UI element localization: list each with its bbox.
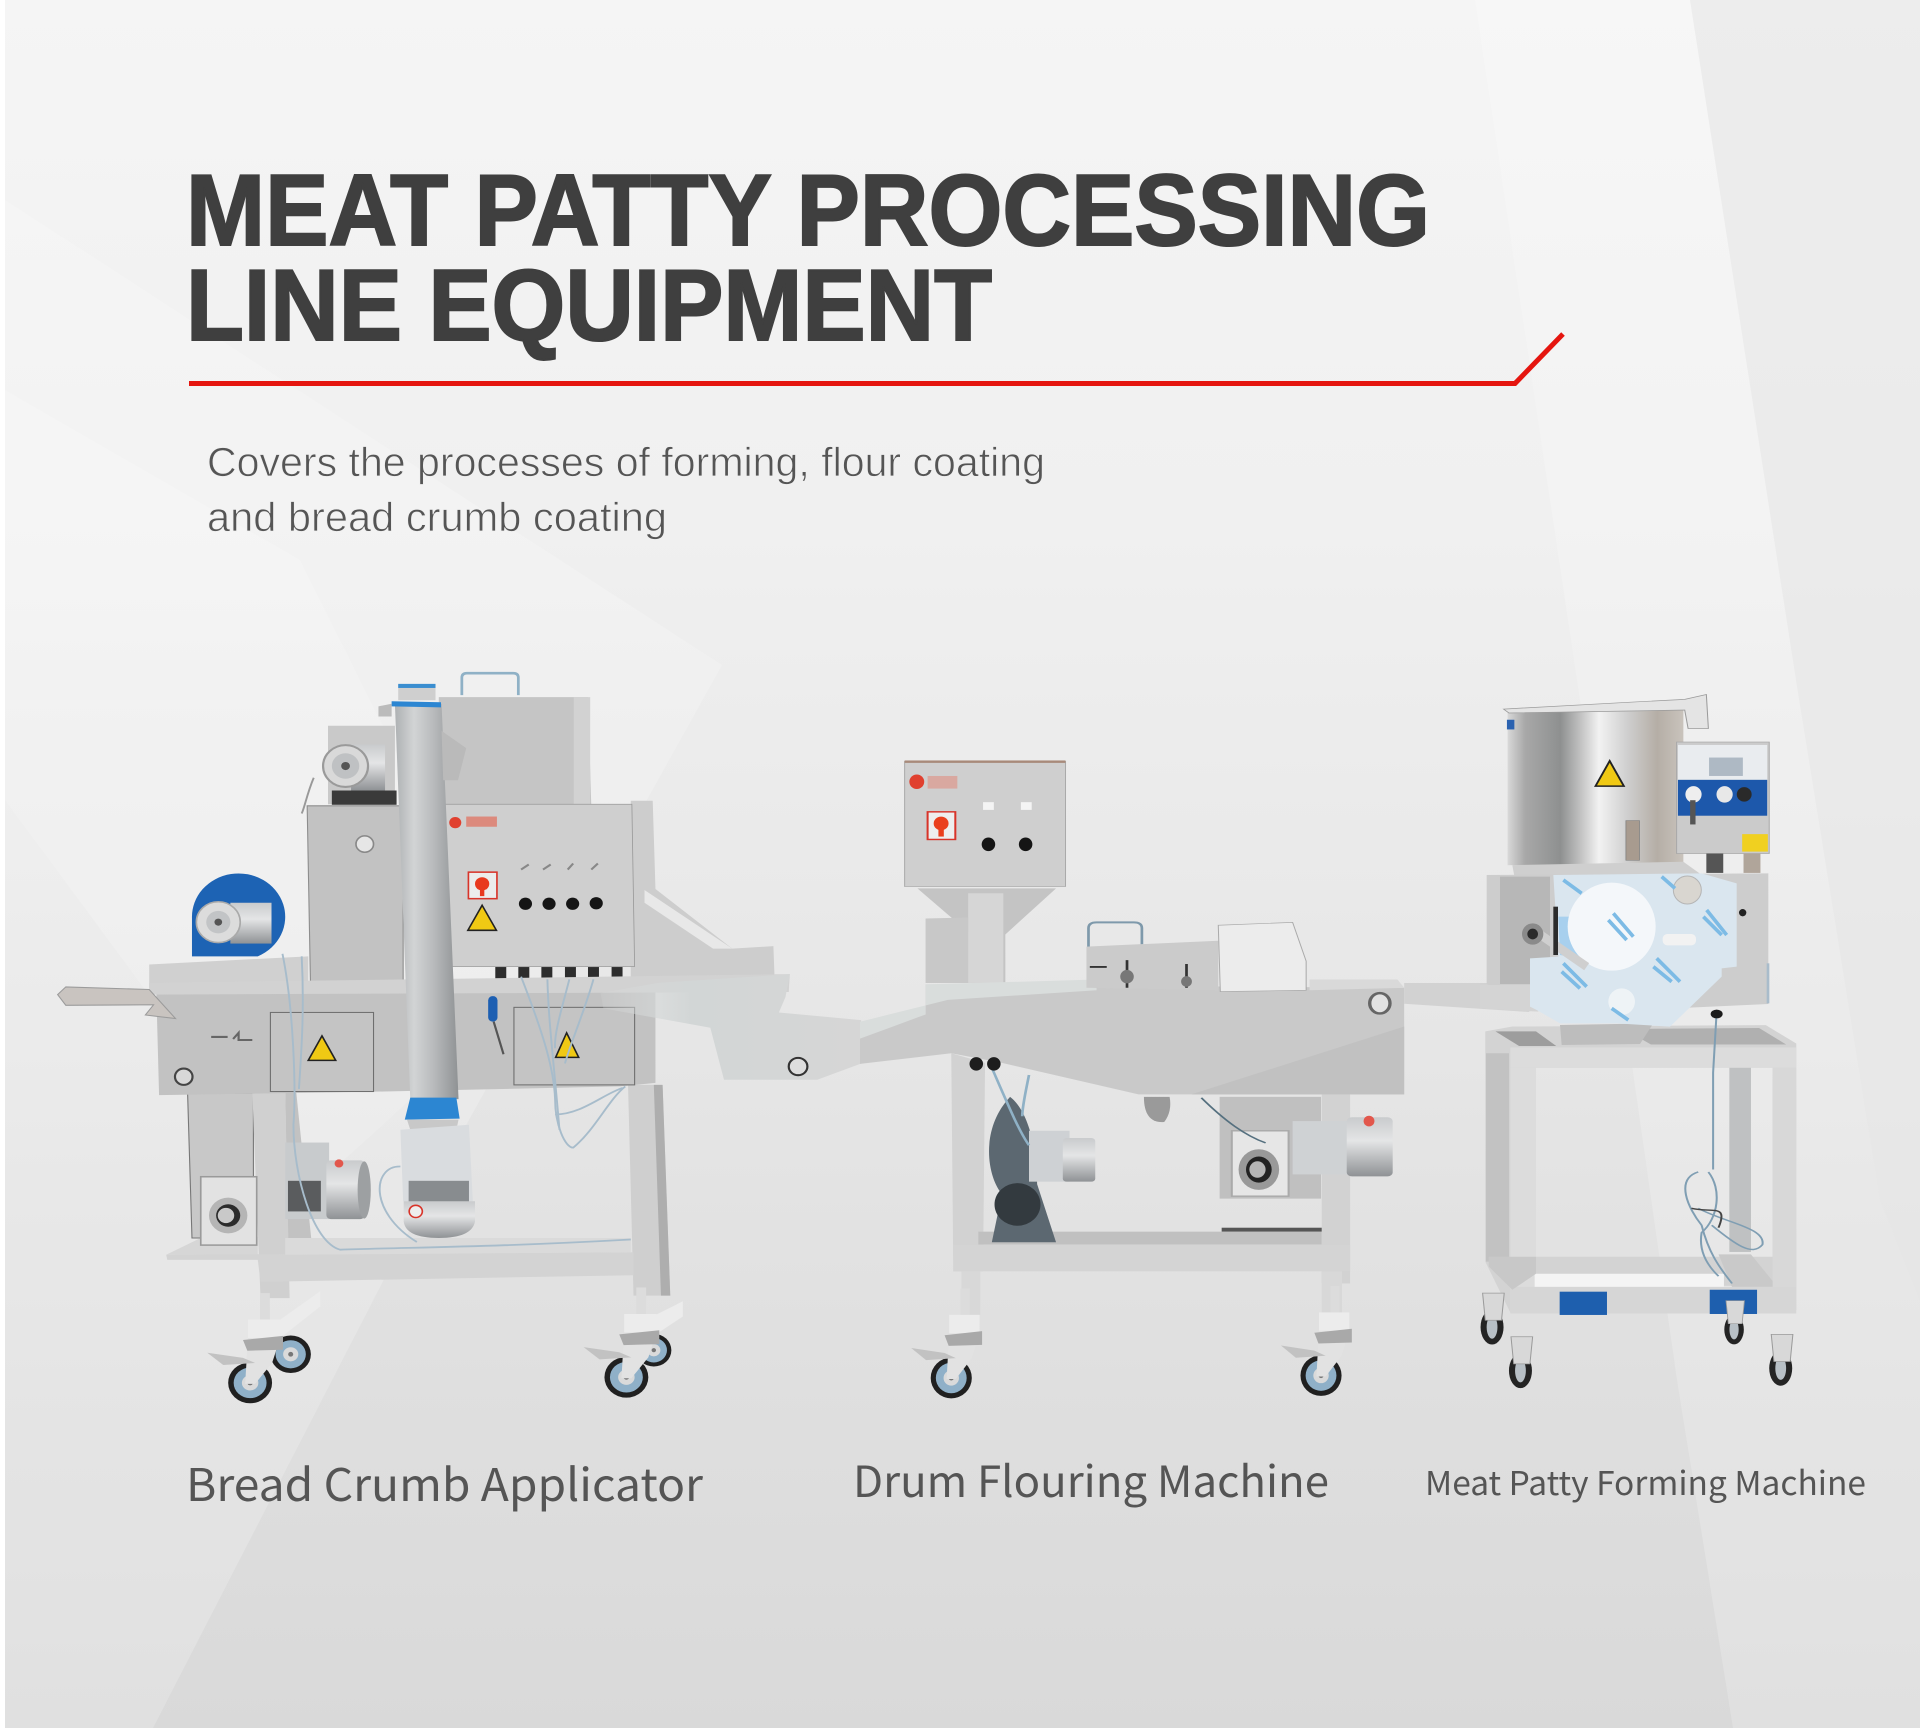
title: MEAT PATTY PROCESSING xyxy=(186,155,1430,267)
blower xyxy=(192,873,285,961)
stand xyxy=(1485,1025,1796,1314)
rear casters xyxy=(271,1334,671,1373)
wiring xyxy=(282,778,631,1250)
machine: drum flouring machine xyxy=(860,760,1404,1398)
transparent cover xyxy=(1522,873,1737,1027)
switch xyxy=(928,812,955,839)
machine: meat patty forming machine xyxy=(1404,695,1796,1388)
screwdriver xyxy=(488,996,504,1054)
subtitle xyxy=(207,439,1045,540)
forming head xyxy=(1480,873,1769,1045)
base signs xyxy=(1560,1290,1757,1315)
indicator holes xyxy=(982,838,1032,851)
drive assembly xyxy=(1201,1097,1393,1232)
label: meat patty forming machine: Meat Patty Forming Machine xyxy=(1425,1457,1866,1505)
cable glands xyxy=(495,967,623,979)
label: bread crumb applicator: Bread Crumb Applicator xyxy=(186,1449,704,1514)
operating panel xyxy=(1677,742,1769,873)
gauge xyxy=(356,836,374,852)
hopper body xyxy=(860,980,1404,1122)
top motor xyxy=(323,745,397,805)
machine: bread crumb applicator xyxy=(58,673,861,1403)
outfeed table xyxy=(601,974,861,1080)
warning signs xyxy=(308,1033,579,1060)
logo xyxy=(909,775,957,789)
cable port xyxy=(1711,1010,1723,1018)
subtitle: and bread crumb coating xyxy=(207,494,667,540)
conveyor tube xyxy=(378,684,466,1130)
control box xyxy=(905,760,1066,886)
front casters xyxy=(207,1287,683,1403)
blower motor xyxy=(989,1068,1095,1242)
warning sign xyxy=(468,905,496,930)
subtitle: Covers the processes of forming, flour coating xyxy=(207,439,1045,485)
rear column xyxy=(188,1093,253,1238)
casters xyxy=(1481,1293,1793,1388)
frame xyxy=(951,1053,1350,1315)
box stand xyxy=(917,888,1056,983)
indicator holes xyxy=(519,897,603,910)
frame cable glands xyxy=(970,1057,1001,1071)
logo xyxy=(449,817,497,828)
main body xyxy=(149,956,790,1095)
red title underline xyxy=(189,334,1563,384)
control box xyxy=(444,804,635,967)
title: LINE EQUIPMENT xyxy=(186,250,992,362)
casters xyxy=(911,1286,1352,1398)
forming body xyxy=(1480,873,1769,1045)
horizontal motor xyxy=(285,1143,371,1219)
infeed link xyxy=(1404,983,1529,1012)
switch xyxy=(468,872,497,899)
access doors xyxy=(270,1007,635,1092)
back leg xyxy=(285,1092,313,1252)
gearbox xyxy=(201,1177,257,1245)
right frame leg xyxy=(628,1085,670,1296)
infeed table xyxy=(58,987,176,1019)
right slope xyxy=(631,801,774,977)
indicator labels xyxy=(521,863,598,870)
vertical motor xyxy=(400,1125,475,1238)
hopper box xyxy=(328,673,591,806)
ingredient bucket xyxy=(1504,695,1708,876)
lower crossbar xyxy=(166,1237,634,1282)
left frame leg xyxy=(252,1092,290,1298)
top section xyxy=(1086,922,1306,992)
side cabinet xyxy=(307,806,403,983)
cable bundle xyxy=(1685,1014,1763,1283)
title xyxy=(186,155,1430,362)
label: drum flouring machine: Drum Flouring Machine xyxy=(853,1448,1329,1510)
